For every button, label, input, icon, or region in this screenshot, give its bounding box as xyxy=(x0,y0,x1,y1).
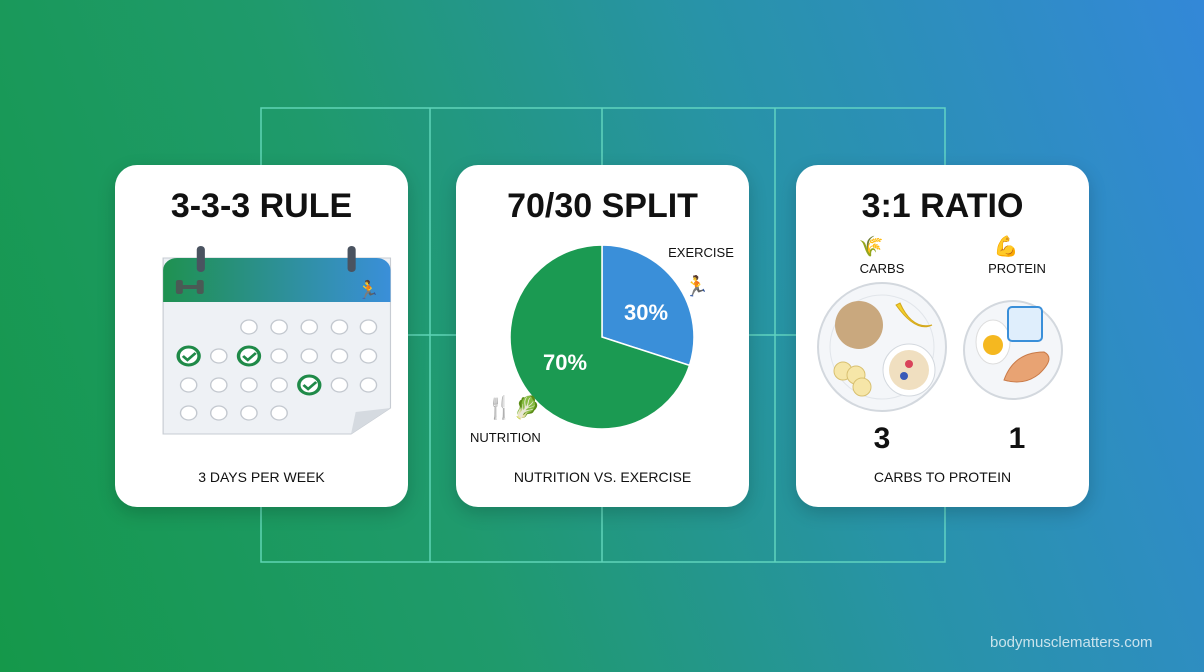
plates: PROTEIN xyxy=(988,261,1046,276)
heading: 70/30 SPLIT xyxy=(507,187,698,225)
plates: 💪 xyxy=(994,234,1018,258)
plates: 🌾 xyxy=(859,235,883,258)
plates: 1 xyxy=(1009,422,1025,455)
pie chart: 🍴🥬 xyxy=(486,395,541,421)
pie chart: NUTRITION xyxy=(470,430,541,445)
caption: 3 DAYS PER WEEK xyxy=(198,469,325,485)
watermark: bodymusclematters.com xyxy=(990,634,1153,651)
pie chart: 30% xyxy=(624,300,668,325)
icon: calendar: 🏃 xyxy=(357,279,379,300)
caption: CARBS TO PROTEIN xyxy=(874,469,1011,485)
pie chart: 🏃 xyxy=(684,274,709,298)
heading: 3-3-3 RULE xyxy=(171,187,352,225)
plates: CARBS xyxy=(860,261,905,276)
plates xyxy=(817,234,1063,455)
caption: NUTRITION VS. EXERCISE xyxy=(514,469,691,485)
icon: calendar xyxy=(162,246,391,434)
plates: 3 xyxy=(874,422,890,455)
panel: 3-3-3 rule xyxy=(115,165,408,507)
pie chart: EXERCISE xyxy=(668,245,734,260)
panel: 3:1 ratio xyxy=(796,165,1089,507)
pie chart xyxy=(470,245,734,445)
panel: 70/30 split xyxy=(456,165,749,507)
heading: 3:1 RATIO xyxy=(862,187,1023,225)
pie chart: 70% xyxy=(543,350,587,375)
